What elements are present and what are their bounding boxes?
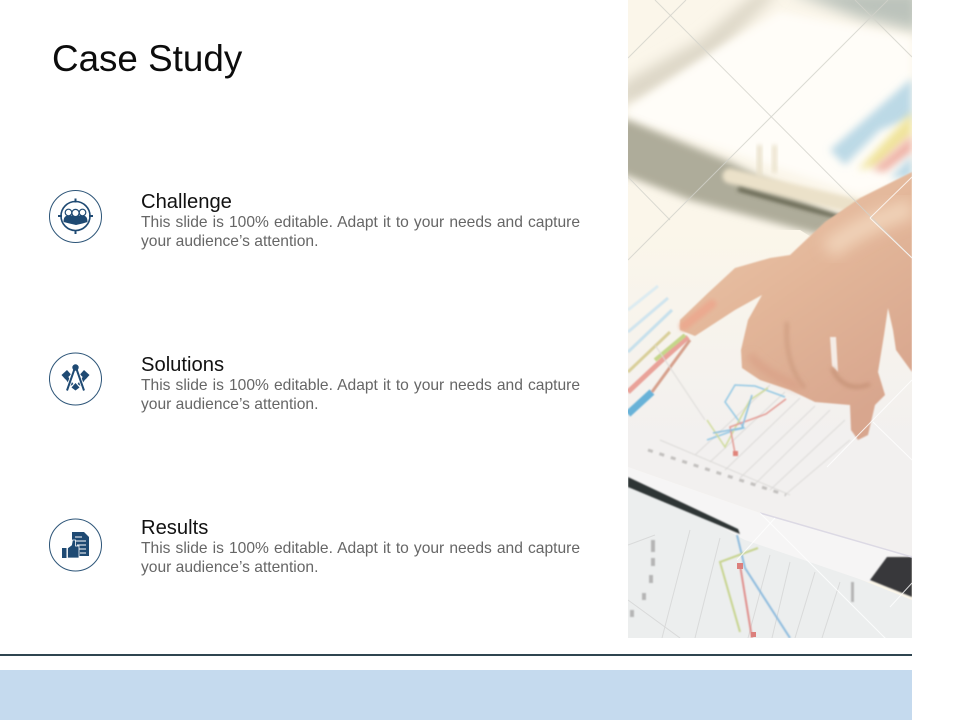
- heading and text: challenge: [141, 191, 580, 250]
- icon: results thumbs up and document: [49, 518, 102, 572]
- printed paper with charts: [628, 230, 912, 557]
- heading and text: results: your audience’s attention.: [141, 559, 318, 576]
- blurred tablet at top of photo: [600, 0, 920, 235]
- heading and text: solutions: your audience’s attention.: [141, 396, 318, 413]
- icon: challenge target with team: [49, 190, 102, 243]
- folder edge and under-paper: [628, 467, 912, 638]
- heading and text: challenge: Challenge: [141, 191, 232, 213]
- pen: [730, 176, 862, 208]
- heading and text: results: [141, 517, 580, 576]
- heading and text: challenge: This slide is 100% editable. Adapt it to your needs and capture: [141, 214, 580, 231]
- diagonal lines over the photo: [628, 0, 912, 640]
- heading and text: results: This slide is 100% editable. Adapt it to your needs and capture: [141, 540, 580, 557]
- blurred colour chart on tablet: [830, 78, 912, 165]
- title: Case Study: [52, 38, 242, 79]
- line chart: [707, 385, 786, 453]
- footer band: [0, 670, 912, 720]
- hand: [680, 172, 912, 440]
- heading and text: solutions: [141, 354, 580, 413]
- photo base: [628, 0, 912, 638]
- heading and text: results: Results: [141, 517, 208, 539]
- footer rule: [0, 654, 912, 656]
- heading and text: solutions: This slide is 100% editable. Adapt it to your needs and capture: [141, 377, 580, 394]
- heading and text: challenge: your audience’s attention.: [141, 233, 318, 250]
- heading and text: solutions: Solutions: [141, 354, 224, 376]
- photo: hand pointing at printed charts: [628, 0, 912, 638]
- axis tick marks: [648, 450, 786, 495]
- icon: solutions compass and tools: [49, 352, 102, 406]
